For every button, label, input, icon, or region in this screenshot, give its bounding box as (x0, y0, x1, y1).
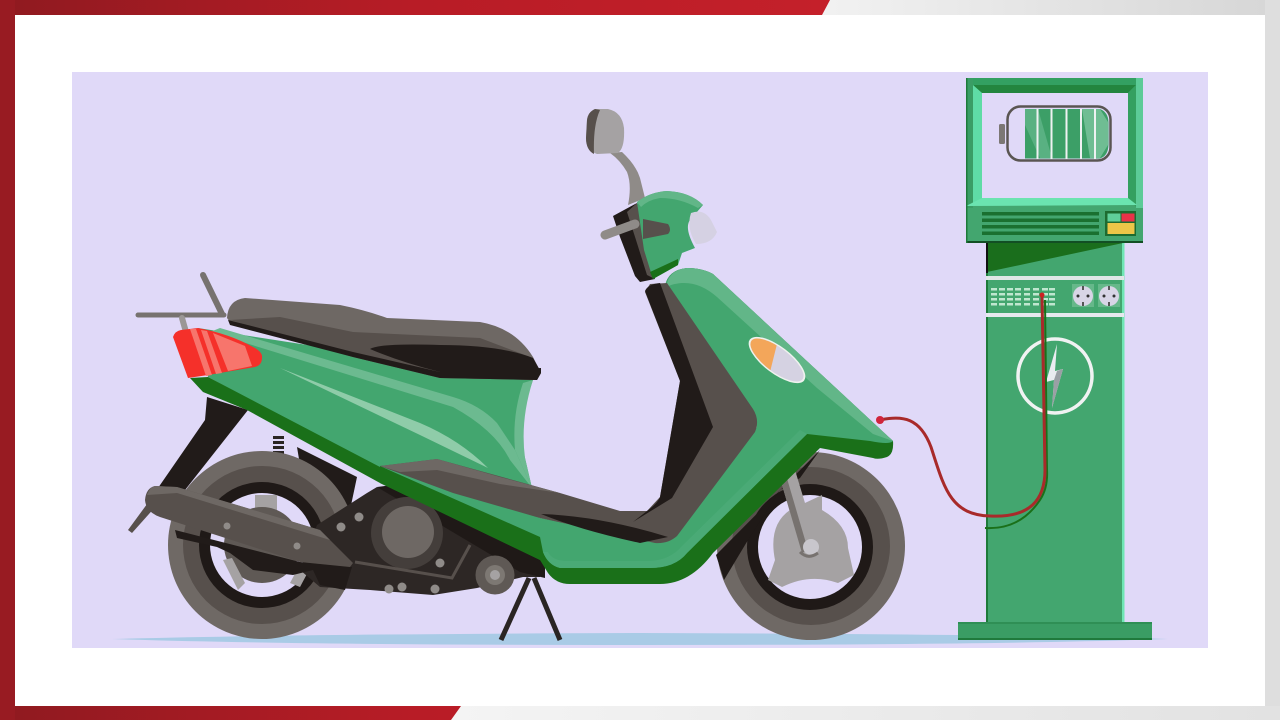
socket panel (991, 284, 1120, 307)
charging station (128, 78, 1152, 640)
charging cable (876, 292, 1047, 528)
side marker lamp (748, 336, 806, 384)
indicator buttons (1105, 211, 1136, 236)
station base (958, 622, 1152, 640)
ground shadow (112, 633, 1168, 645)
tail light (173, 328, 262, 378)
icon: lightning bolt in circle (1018, 339, 1092, 413)
floorboard and leg shield (380, 283, 757, 543)
rear strut and spring (128, 397, 357, 533)
exhaust muffler (145, 486, 353, 590)
station pillar (986, 243, 1124, 625)
front wheel (716, 450, 905, 640)
mirror (586, 109, 645, 205)
luggage rack (138, 275, 224, 332)
battery icon (999, 106, 1110, 160)
rear wheel (168, 451, 356, 639)
station head (966, 78, 1143, 243)
kickstand (501, 578, 560, 640)
handlebar head (605, 191, 717, 282)
seat (227, 298, 541, 380)
front fork (780, 470, 819, 556)
background panel (72, 72, 1208, 648)
vent lines (982, 212, 1099, 235)
scooter front shield and floor (380, 268, 893, 584)
scooter rear body (190, 328, 540, 560)
engine and swing arm (300, 484, 545, 595)
